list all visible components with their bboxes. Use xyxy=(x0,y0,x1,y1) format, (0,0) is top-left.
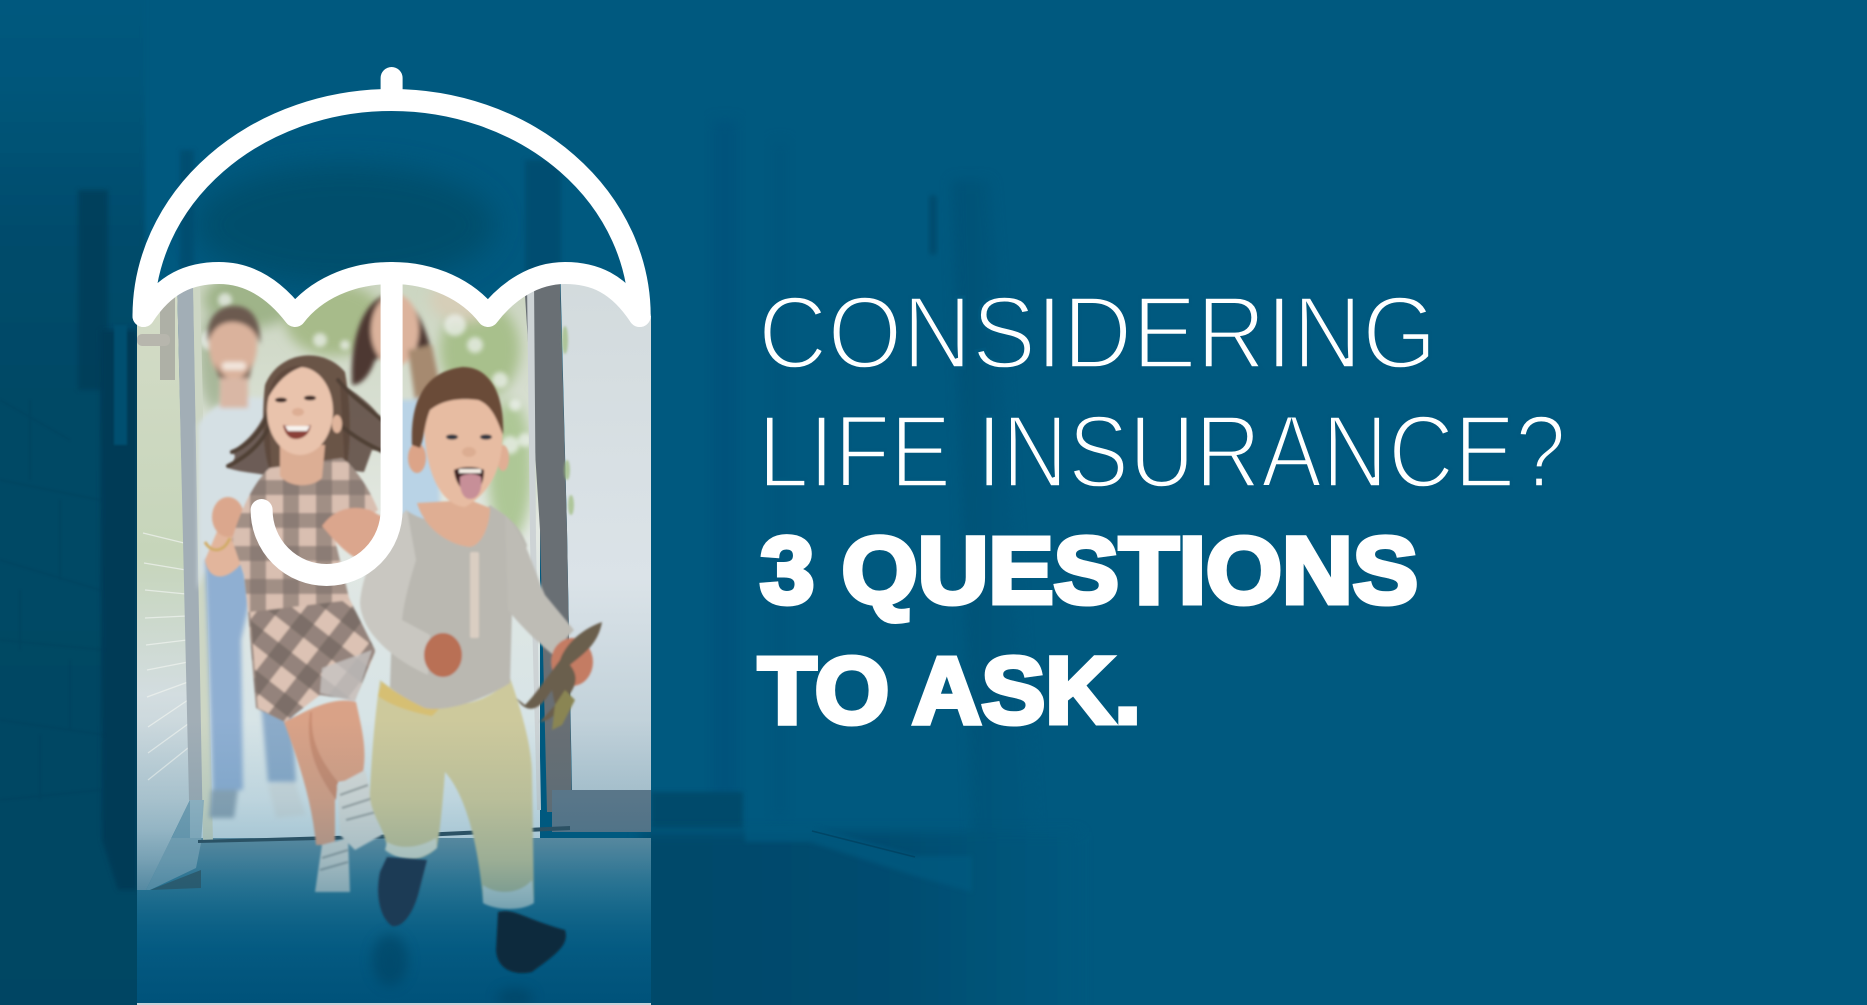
boy eyes xyxy=(446,434,492,440)
open door panel with slats and handle xyxy=(137,280,213,890)
right door frame and wall xyxy=(524,260,651,832)
toy dinosaur xyxy=(516,622,602,730)
girl in plaid dress xyxy=(205,355,388,892)
girl flyaway hair mass xyxy=(228,382,384,478)
girl flyaway hair strands xyxy=(228,380,384,466)
boy sandals xyxy=(378,857,566,973)
bottom light edge of photo xyxy=(137,1003,651,1005)
bottom fade into blue xyxy=(137,750,651,962)
boy open mouth with tongue xyxy=(454,467,484,493)
door wedge xyxy=(150,870,201,890)
icon: white umbrella outline xyxy=(144,78,640,575)
heading: 3 questions to ask xyxy=(758,518,1418,744)
boy fist xyxy=(424,633,462,677)
garden seen through doorway xyxy=(190,260,540,845)
boy trousers xyxy=(370,678,534,908)
umbrella handle xyxy=(262,273,392,575)
boy right hand xyxy=(551,638,593,686)
boy torso xyxy=(390,505,527,709)
heading line 2: LIFE INSURANCE? xyxy=(758,394,1566,509)
umbrella scalloped edge xyxy=(144,273,640,316)
girl dress xyxy=(232,458,378,722)
background: faded hallway with doors xyxy=(640,120,1080,1005)
girl bare arm and fist xyxy=(204,531,242,578)
boy neck xyxy=(417,500,490,547)
girl hair xyxy=(263,355,350,470)
girl legs xyxy=(284,701,364,845)
girl right hand xyxy=(321,506,380,558)
boy ears xyxy=(408,443,426,473)
girl smile xyxy=(283,425,311,439)
heading: considering life insurance xyxy=(758,275,1566,509)
girl eyes xyxy=(275,396,316,402)
boy in grey shirt xyxy=(360,367,602,909)
heading line 4: TO ASK. xyxy=(758,638,1141,744)
threshold xyxy=(198,826,570,843)
floor shadows xyxy=(372,934,533,1005)
photo: family running through doorway xyxy=(137,260,651,1005)
girl shoes xyxy=(337,770,382,850)
boy face xyxy=(424,394,503,507)
heading line 1: CONSIDERING xyxy=(758,275,1437,390)
boy left arm xyxy=(360,510,430,675)
background: blue-tinted interior under umbrella canopy xyxy=(180,150,561,320)
floor xyxy=(137,838,651,970)
man in background xyxy=(198,306,306,818)
boy shirt placket xyxy=(470,552,479,638)
girl neck and face xyxy=(280,445,325,485)
boy hair xyxy=(412,367,503,448)
background: tinted brick wall and door frame at left xyxy=(0,0,145,1005)
woman in background xyxy=(352,293,440,540)
umbrella tip xyxy=(381,78,403,100)
boy right arm xyxy=(511,549,574,655)
umbrella canopy xyxy=(144,100,640,316)
heading line 3: 3 QUESTIONS xyxy=(760,518,1418,624)
